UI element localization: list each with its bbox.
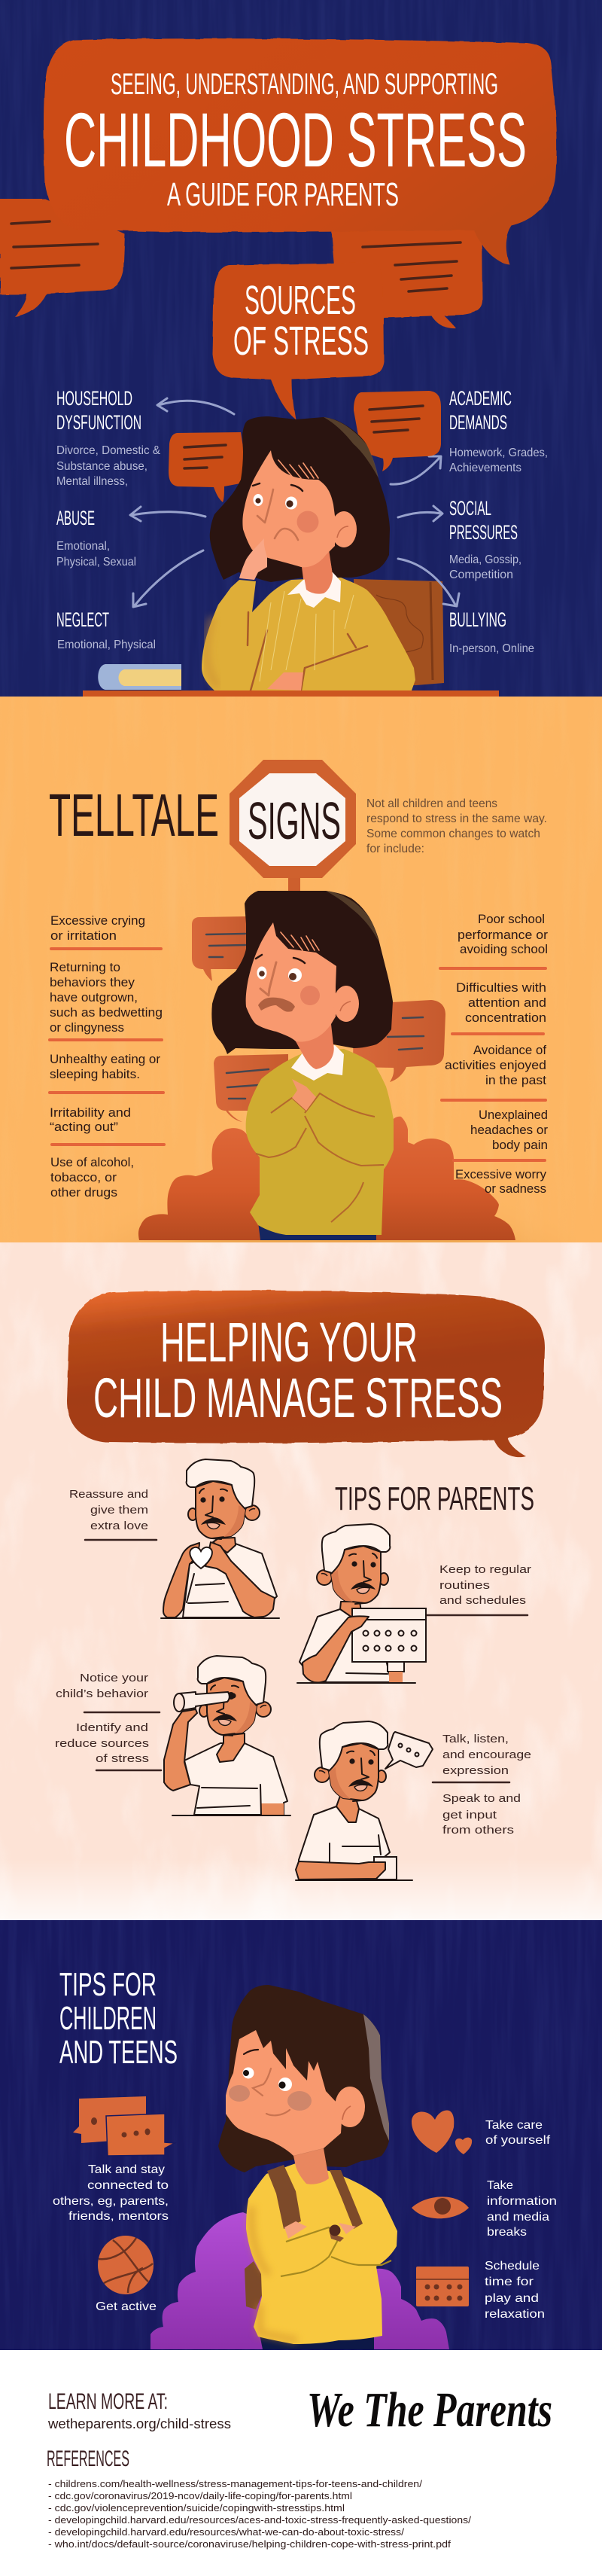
bushes [138,1117,515,1240]
source: bullying: BULLYING [449,608,506,631]
sign: excessive worry: or sadness [485,1181,546,1196]
stop sign with heading: signs: SIGNS [248,791,341,850]
sign: unhealthy eating [50,1052,163,1093]
sign: unhealthy eating: sleeping habits. [50,1067,140,1081]
arrow: to social pressures [398,506,442,521]
tip: talk and stay connected: friends, mentors [68,2210,169,2223]
arm lines [281,2227,391,2276]
references list: - cdc.gov/coronavirus/2019-ncov/daily-life-coping/for-parents.html [48,2490,352,2501]
speech bubble: left decorative [0,199,125,317]
intro text: for include: [366,843,424,855]
sign: irritability: “acting out” [50,1120,118,1134]
tip: reassure: Reassure and [69,1488,148,1501]
watch [330,2224,344,2242]
source: social pressures: Media, Gossip, [449,553,521,566]
learn more: LEARN MORE AT: [48,2389,168,2414]
neck [293,2148,329,2184]
learn more [47,2389,231,2431]
sign: headaches: body pain [492,1138,548,1152]
tip: reassure: extra love [90,1520,148,1532]
panel: telltale signs [0,697,602,1393]
sweater [246,1049,394,1235]
tip: notice behavior [56,1672,160,1712]
sign: headaches [454,1108,548,1160]
tip: talk and stay connected: Talk and stay [88,2163,165,2176]
tip: routines: routines [439,1579,490,1592]
hair shine [363,2014,389,2141]
sign: irritability: Irritability and [50,1105,131,1120]
nose and mouth [257,489,298,540]
learn more: wetheparents.org/child-stress [47,2416,231,2431]
panel: sources of stress [0,0,602,697]
sign: headaches: headaches or [470,1123,548,1137]
tip: identify sources: of stress [96,1752,149,1765]
hair [210,416,390,582]
sign: excessive crying [50,913,161,949]
brows [253,483,303,491]
illustration: worried child at desk [83,416,499,697]
chair [354,579,444,685]
sign: substance use [50,1155,134,1200]
sign: excessive crying: or irritation [50,928,117,943]
references list: - childrens.com/health-wellness/stress-management-tips-for-teens-and-children/ [48,2478,422,2489]
source: neglect: Emotional, Physical [57,639,156,651]
sweater shading [251,2206,297,2340]
tip: play and relaxation: Schedule [485,2260,540,2273]
source: household dysfunction: Mental illness, [56,475,128,488]
references list: - who.int/docs/default-source/coronaviruse/helping-children-cope-with-stress-print.pdf [48,2538,451,2550]
cheek [300,986,320,1005]
source: abuse: Physical, Sexual [56,556,136,569]
brows [256,955,305,963]
hand on chin [239,538,267,580]
source: neglect [56,608,156,651]
sign: unhealthy eating: Unhealthy eating or [50,1052,160,1066]
neck [301,550,341,602]
tip: media breaks: breaks [487,2226,527,2239]
icon: calendar [416,2267,469,2306]
sign: attention difficulties: Difficulties with [456,980,546,995]
tip: take care: of yourself [485,2134,551,2147]
eyes [242,2068,254,2078]
tip: notice behavior: child’s behavior [56,1687,148,1700]
tip: media breaks [487,2179,557,2239]
source: household dysfunction: Substance abuse, [56,460,147,473]
speech bubble: right [353,1000,445,1082]
icon: basketball [98,2236,154,2294]
sign: returning to outgrown behaviors [50,960,163,1040]
heading: tips for children and teens [59,1966,178,2071]
sign: poor school performance: Poor school [478,912,545,926]
tip: speak to others: Speak to and [442,1792,521,1805]
collar [287,572,341,608]
sign: excessive worry [455,1167,546,1196]
sign: substance use: Use of alcohol, [50,1155,134,1169]
intro text [366,797,547,855]
hair highlight [326,891,379,941]
sign: returning to outgrown behaviors: behaviors they [50,975,135,989]
cheek [296,511,319,533]
speech bubble: lower left [214,1054,288,1122]
hair highlight [324,417,379,478]
tip: media breaks: Take [487,2179,513,2192]
intro text: Not all children and teens [366,797,497,810]
speech bubble with dots [385,1732,433,1769]
tip: identify sources: Identify and [76,1721,148,1734]
tip: talk and stay connected [53,2163,169,2223]
sign: avoidance of activities: activities enjoyed [445,1058,546,1072]
speech bubble: small right [354,391,441,471]
title line 3: A GUIDE FOR PARENTS [167,176,399,213]
sign: poor school performance: avoiding school [460,942,548,956]
hair [218,1985,389,2172]
tip: reassure: give them [90,1504,148,1517]
sign: attention difficulties: concentration [465,1011,546,1025]
collar [291,1045,344,1081]
tip: identify sources: reduce sources [55,1737,149,1750]
sweater seams [256,1093,384,1222]
icon: chat bubbles [73,2096,175,2156]
banner bubble [67,1291,545,1457]
illustration: parent with telescope [164,1656,290,1815]
tip: play and relaxation: relaxation [485,2308,545,2321]
neck [296,1024,334,1069]
desk [83,690,499,697]
fringe strands [278,460,318,478]
references list: - developingchild.harvard.edu/resources/what-we-can-do-about-toxic-stress/ [48,2526,404,2538]
sign: excessive crying: Excessive crying [50,913,145,928]
hand [292,1079,316,1111]
hair [211,891,393,1054]
ear [335,2087,365,2127]
sweater seams [248,612,367,690]
source: academic demands: Achievements [449,462,521,474]
panel: footer [0,2350,602,2576]
stop sign with heading: signs [230,760,356,896]
eyes [257,967,266,979]
source: social pressures: Competition [449,569,513,581]
source: abuse: ABUSE [56,507,95,529]
face [242,450,335,567]
source: abuse: Emotional, [56,540,110,553]
sign: attention difficulties: attention and [468,995,546,1010]
telescope [174,1692,235,1712]
tip: play and relaxation: time for [485,2276,534,2288]
tip: routines: Keep to regular [439,1563,531,1576]
references list: - developingchild.harvard.edu/resources/aces-and-toxic-stress-frequently-asked-questions/ [48,2514,471,2526]
tip: media breaks: information [487,2195,557,2208]
arrow: to abuse [130,507,205,521]
heading: tips for children and teens: TIPS FOR [59,1966,157,2003]
sign: poor school performance: performance or [458,928,548,942]
panel: tips for children and teens [0,1920,602,2350]
illustration: parent making heart [161,1459,279,1618]
sign: attention difficulties [452,980,546,1034]
nose and smile [253,2068,290,2115]
tip: routines: and schedules [439,1594,526,1607]
ear [331,511,357,547]
tip: routines [426,1563,531,1615]
source: social pressures: SOCIAL [449,497,491,520]
panel: helping your child manage stress [0,1242,602,1920]
brow [244,2050,258,2054]
ear [333,986,359,1022]
heading bubble: sources of stress [212,263,384,419]
illustration: parent talking [296,1721,433,1880]
sign: irritability [50,1105,164,1145]
arrow: to neglect [133,550,203,607]
book [98,664,181,690]
heading: references: REFERENCES [47,2446,129,2471]
illustration: parent with calendar [297,1524,426,1683]
dusty halo [79,1092,576,1393]
tip: talk and listen [433,1733,531,1782]
face [246,922,336,1042]
tip: talk and stay connected: others, eg, parents, [53,2195,169,2208]
tip: talk and stay connected: connected to [87,2179,169,2192]
purple cloud [150,2212,449,2349]
icon: hearts [412,2111,472,2154]
sweater [202,578,415,690]
sign: poor school performance [440,912,548,968]
tip: talk and listen: and encourage [442,1748,531,1761]
references list: - cdc.gov/violenceprevention/suicide/copingwith-stresstips.html [48,2502,345,2514]
sign: returning to outgrown behaviors: or clingyness [50,1020,124,1035]
source: neglect: NEGLECT [56,608,109,631]
tip: speak to others: from others [442,1824,514,1837]
source: household dysfunction [56,387,160,488]
source: abuse [56,507,136,569]
eyes [253,494,263,506]
illustration: confident child [218,1985,397,2349]
cheeks [229,2085,250,2102]
sign: avoidance of activities [442,1043,546,1100]
source: academic demands: Homework, Grades, [449,447,548,459]
source: household dysfunction: HOUSEHOLD [56,387,132,410]
backpack straps [267,2165,363,2229]
tip: reassure [69,1488,157,1540]
heading: telltale: TELLTALE [49,782,219,849]
tip: take care [485,2119,551,2147]
banner bubble: HELPING YOUR [160,1311,418,1373]
tip: identify sources [55,1721,161,1770]
sign: returning to outgrown behaviors: such as bedwetting [50,1005,163,1020]
illustration: anxious child [211,891,394,1240]
speech bubble: upper left [192,916,250,981]
tip: talk and listen: Talk, listen, [442,1733,509,1745]
source: academic demands: DEMANDS [449,411,507,434]
tip: speak to others [442,1792,521,1837]
speech bubble: right decorative [331,226,482,328]
sign: returning to outgrown behaviors: Returning to [50,960,120,974]
face [226,2030,342,2156]
source: social pressures [449,497,521,581]
sign: avoidance of activities: in the past [485,1073,546,1087]
tip: play and relaxation [485,2260,545,2321]
hand on desk [267,672,303,690]
source: household dysfunction: Divorce, Domestic & [56,444,160,457]
heading bubble: sources of stress: OF STRESS [233,319,369,364]
sign: substance use: other drugs [50,1185,117,1200]
source: social pressures: PRESSURES [449,521,518,544]
sign: headaches: Unexplained [479,1108,548,1122]
mouth [258,998,295,1012]
source: bullying: In-person, Online [449,642,534,655]
neck overlay [303,552,333,594]
backpack [245,2261,278,2309]
sign: excessive worry: Excessive worry [455,1167,546,1181]
sign: returning to outgrown behaviors: have outgrown, [50,990,138,1004]
arrow: to household dysfunction [157,398,234,414]
hands [284,2221,356,2239]
arrow: to bullying [398,559,459,606]
intro text: respond to stress in the same way. [366,812,547,825]
sign: substance use: tobacco, or [50,1170,117,1184]
tip: talk and listen: expression [442,1764,509,1777]
tip: speak to others: get input [442,1809,497,1821]
tip: notice behavior: Notice your [80,1672,148,1684]
arrow: to academic demands [391,456,441,484]
fringe strands [281,932,319,950]
calendar [352,1608,426,1662]
source: household dysfunction: DYSFUNCTION [56,411,141,434]
title bubble [44,38,557,264]
references list [48,2478,471,2550]
icon: eye [412,2196,469,2218]
sign: avoidance of activities: Avoidance of [473,1043,546,1057]
source: bullying [449,608,534,655]
nose [260,962,276,995]
trousers [258,1222,376,1240]
trousers [260,2334,374,2349]
tip: play and relaxation: play and [485,2292,539,2305]
heading: tips for children and teens: AND TEENS [59,2034,178,2071]
sweater [246,2163,397,2344]
tip: take care: Take care [485,2119,543,2132]
speech bubble: small left [169,432,248,502]
source: academic demands [449,387,548,474]
tip: media breaks: and media [487,2211,549,2224]
intro text: Some common changes to watch [366,828,540,840]
tip: get active: Get active [96,2300,157,2313]
sweater shading [206,617,218,687]
heading bubble: sources of stress: SOURCES [245,278,356,323]
heading: tips for children and teens: CHILDREN [59,2000,157,2037]
source: academic demands: ACADEMIC [449,387,512,410]
